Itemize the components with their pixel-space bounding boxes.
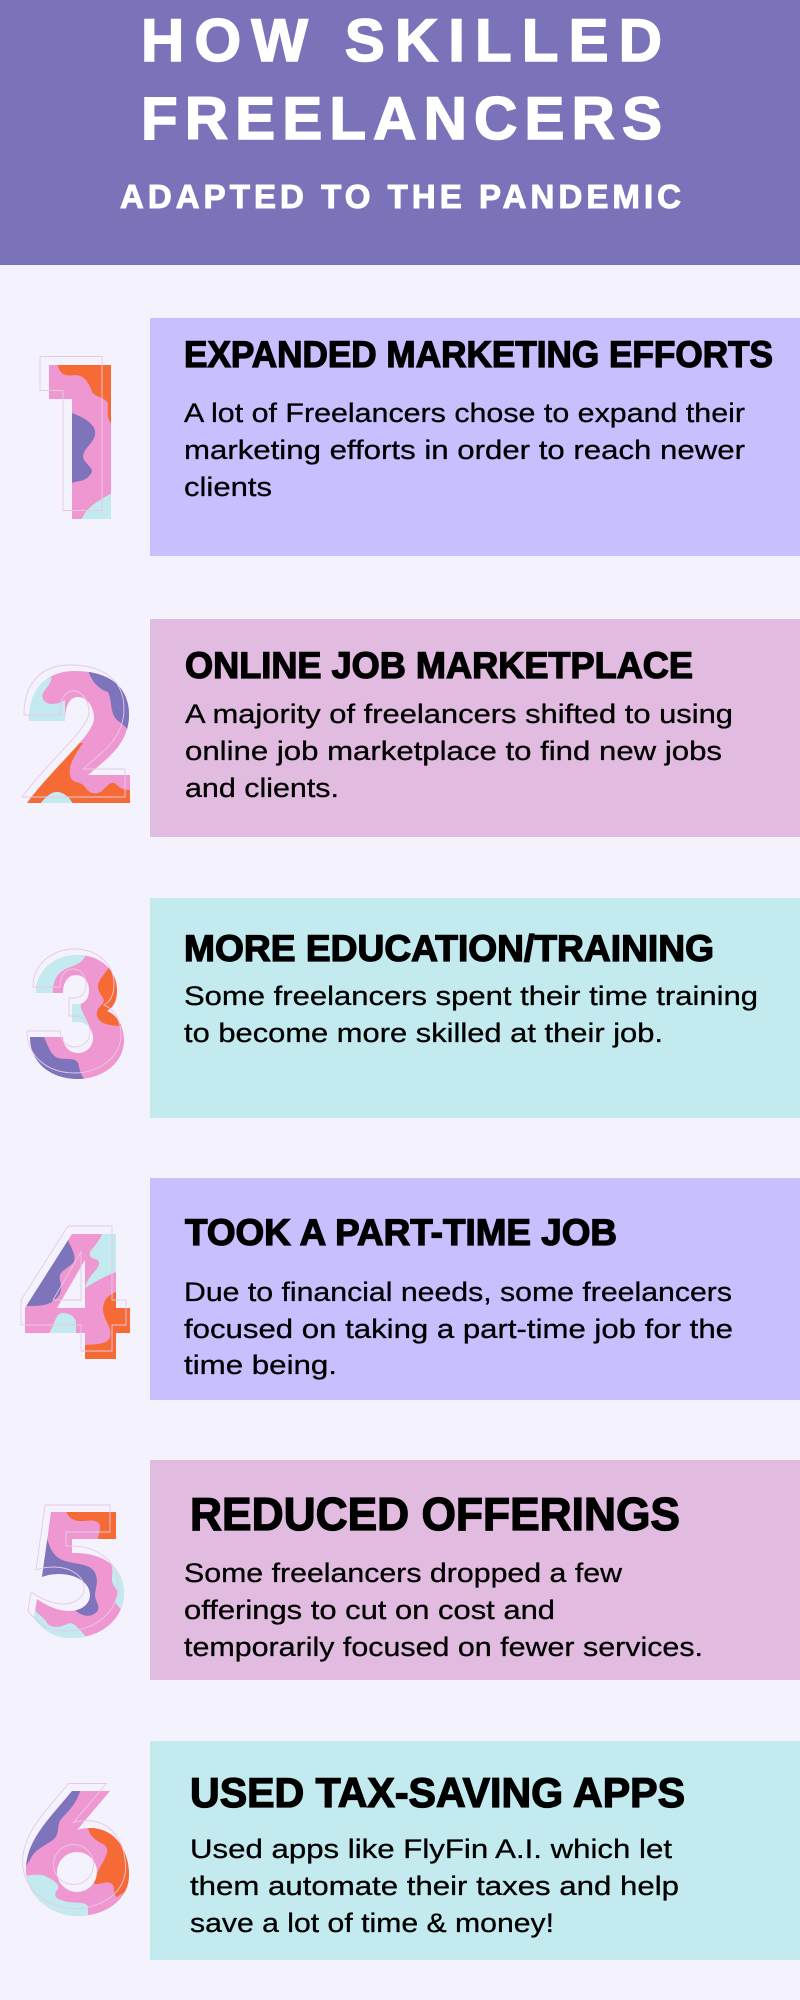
icon: number 6 (20, 1784, 135, 1920)
icon: number 2 (21, 664, 130, 803)
heading 2: ONLINE JOB MARKETPLACE (185, 645, 693, 686)
body text 4: Due to financial needs, some freelancers (184, 1277, 732, 1307)
panel: more education/training (150, 898, 800, 1118)
body text 1 (184, 398, 745, 502)
heading 4: TOOK A PART-TIME JOB (185, 1212, 617, 1253)
heading 5: REDUCED OFFERINGS (190, 1488, 680, 1540)
body text 2 (185, 699, 733, 803)
subtitle: ADAPTED TO THE PANDEMIC (120, 178, 681, 215)
panel: took a part-time job (150, 1178, 800, 1400)
header banner (0, 0, 800, 265)
body text 1: marketing efforts in order to reach newer (184, 435, 745, 465)
body text 5: Some freelancers dropped a few (184, 1558, 623, 1588)
body text 2: online job marketplace to find new jobs (185, 736, 722, 766)
panel: online job marketplace (150, 619, 800, 837)
body text 1: A lot of Freelancers chose to expand their (184, 398, 745, 428)
title line 1: HOW SKILLED (141, 7, 662, 74)
body text 1: clients (184, 472, 272, 502)
body text 2: and clients. (185, 773, 339, 803)
icon: number 5 (28, 1504, 124, 1638)
body text 6: Used apps like FlyFin A.I. which let (190, 1834, 673, 1864)
icon: number 3 (26, 948, 124, 1079)
icon: number 1 (40, 356, 111, 519)
body text 3: Some freelancers spent their time training (184, 981, 758, 1011)
body text 2: A majority of freelancers shifted to using (185, 699, 733, 729)
panel: used tax-saving apps (150, 1741, 800, 1960)
body text 6: them automate their taxes and help (190, 1871, 679, 1901)
body text 6: save a lot of time & money! (190, 1908, 554, 1938)
panel: reduced offerings (150, 1460, 800, 1680)
body text 5: offerings to cut on cost and (184, 1595, 555, 1625)
body text 4: focused on taking a part-time job for the (184, 1314, 733, 1344)
body text 3 (184, 981, 758, 1048)
panel: expanded marketing efforts (150, 318, 800, 556)
heading 1: EXPANDED MARKETING EFFORTS (184, 334, 773, 375)
heading 6: USED TAX-SAVING APPS (190, 1769, 685, 1816)
icon: number 4 (20, 1226, 130, 1359)
heading 3: MORE EDUCATION/TRAINING (184, 928, 714, 969)
body text 4 (184, 1277, 733, 1380)
body text 5: temporarily focused on fewer services. (184, 1632, 703, 1662)
body text 3: to become more skilled at their job. (184, 1018, 663, 1048)
title line 2: FREELANCERS (141, 85, 662, 152)
body text 6 (190, 1834, 679, 1938)
body text 5 (184, 1558, 703, 1662)
body text 4: time being. (184, 1350, 337, 1380)
